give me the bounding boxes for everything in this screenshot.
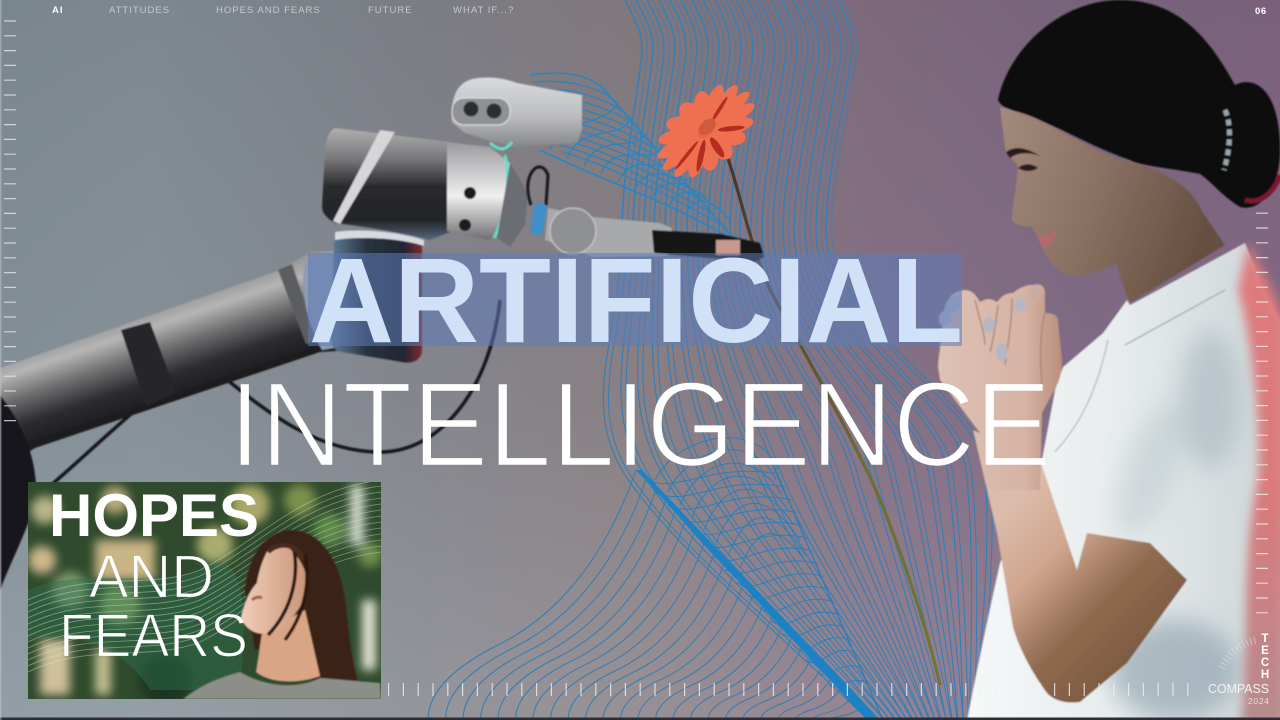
woman lips: [1037, 230, 1056, 248]
tech compass logo: 2024: [1248, 696, 1269, 706]
robot silver collar: [447, 142, 510, 240]
woman pink light on shoulder: [1238, 243, 1280, 720]
robot base joint: [331, 234, 422, 363]
navigation bar: [52, 5, 514, 16]
inset heading: [53, 494, 257, 656]
title: artificial: ARTIFICIAL: [309, 232, 963, 368]
woman face and neck: [1000, 107, 1225, 303]
blue wave line ribbon: [428, 0, 992, 720]
robot black band: [121, 322, 176, 406]
robot left joint: [0, 395, 36, 590]
robot cables: [18, 300, 500, 512]
tech compass logo: COMPASS: [1208, 682, 1269, 696]
tech compass logo: C: [1261, 657, 1269, 669]
icon: orange gerbera flower: [639, 66, 773, 196]
tech compass logo: [1208, 633, 1269, 706]
woman forearm and upper arm: [973, 430, 1187, 703]
woman hair: [998, 0, 1280, 208]
woman finger separations: [975, 298, 1045, 385]
navigation bar: FUTURE: [368, 5, 413, 16]
left ruler ticks: [4, 20, 16, 425]
woman shirt: [967, 243, 1280, 720]
bottom ruler ticks: [388, 683, 1195, 696]
woman shirt shading: [1103, 330, 1240, 720]
inset heading: FEARS: [59, 602, 248, 670]
tech compass logo: H: [1261, 669, 1269, 681]
navigation bar: HOPES AND FEARS: [216, 5, 321, 16]
title: intelligence: INTELLIGENCE: [229, 357, 1051, 492]
page number: 06: [1255, 6, 1267, 17]
inset woman: [183, 530, 381, 699]
flower stem: [725, 150, 940, 685]
woman photo cut-out: [937, 0, 1280, 720]
robot camera head: [452, 77, 582, 147]
robot long arm segment: [0, 250, 350, 470]
robot wrist cylinder: [322, 128, 450, 240]
woman clasped hands: [938, 284, 1062, 490]
robot arm: [0, 77, 764, 590]
right ruler ticks: [1256, 213, 1268, 620]
tech compass logo: E: [1261, 645, 1269, 657]
robot cable loop: [528, 167, 548, 205]
navigation bar: ATTITUDES: [109, 5, 170, 16]
robot forearm: [545, 208, 672, 257]
tech compass logo: T: [1261, 633, 1269, 645]
robot gripper: [652, 230, 764, 262]
woman fingernails: [937, 282, 1045, 361]
inset panel: hopes and fears: [28, 480, 382, 706]
inset heading: AND: [89, 542, 214, 610]
inset heading: HOPES: [49, 482, 259, 549]
woman eye and brow: [1006, 148, 1040, 171]
inset photo: [28, 480, 382, 706]
navigation bar: WHAT IF...?: [453, 5, 514, 16]
navigation bar: AI: [52, 5, 64, 16]
title band: [308, 253, 962, 346]
